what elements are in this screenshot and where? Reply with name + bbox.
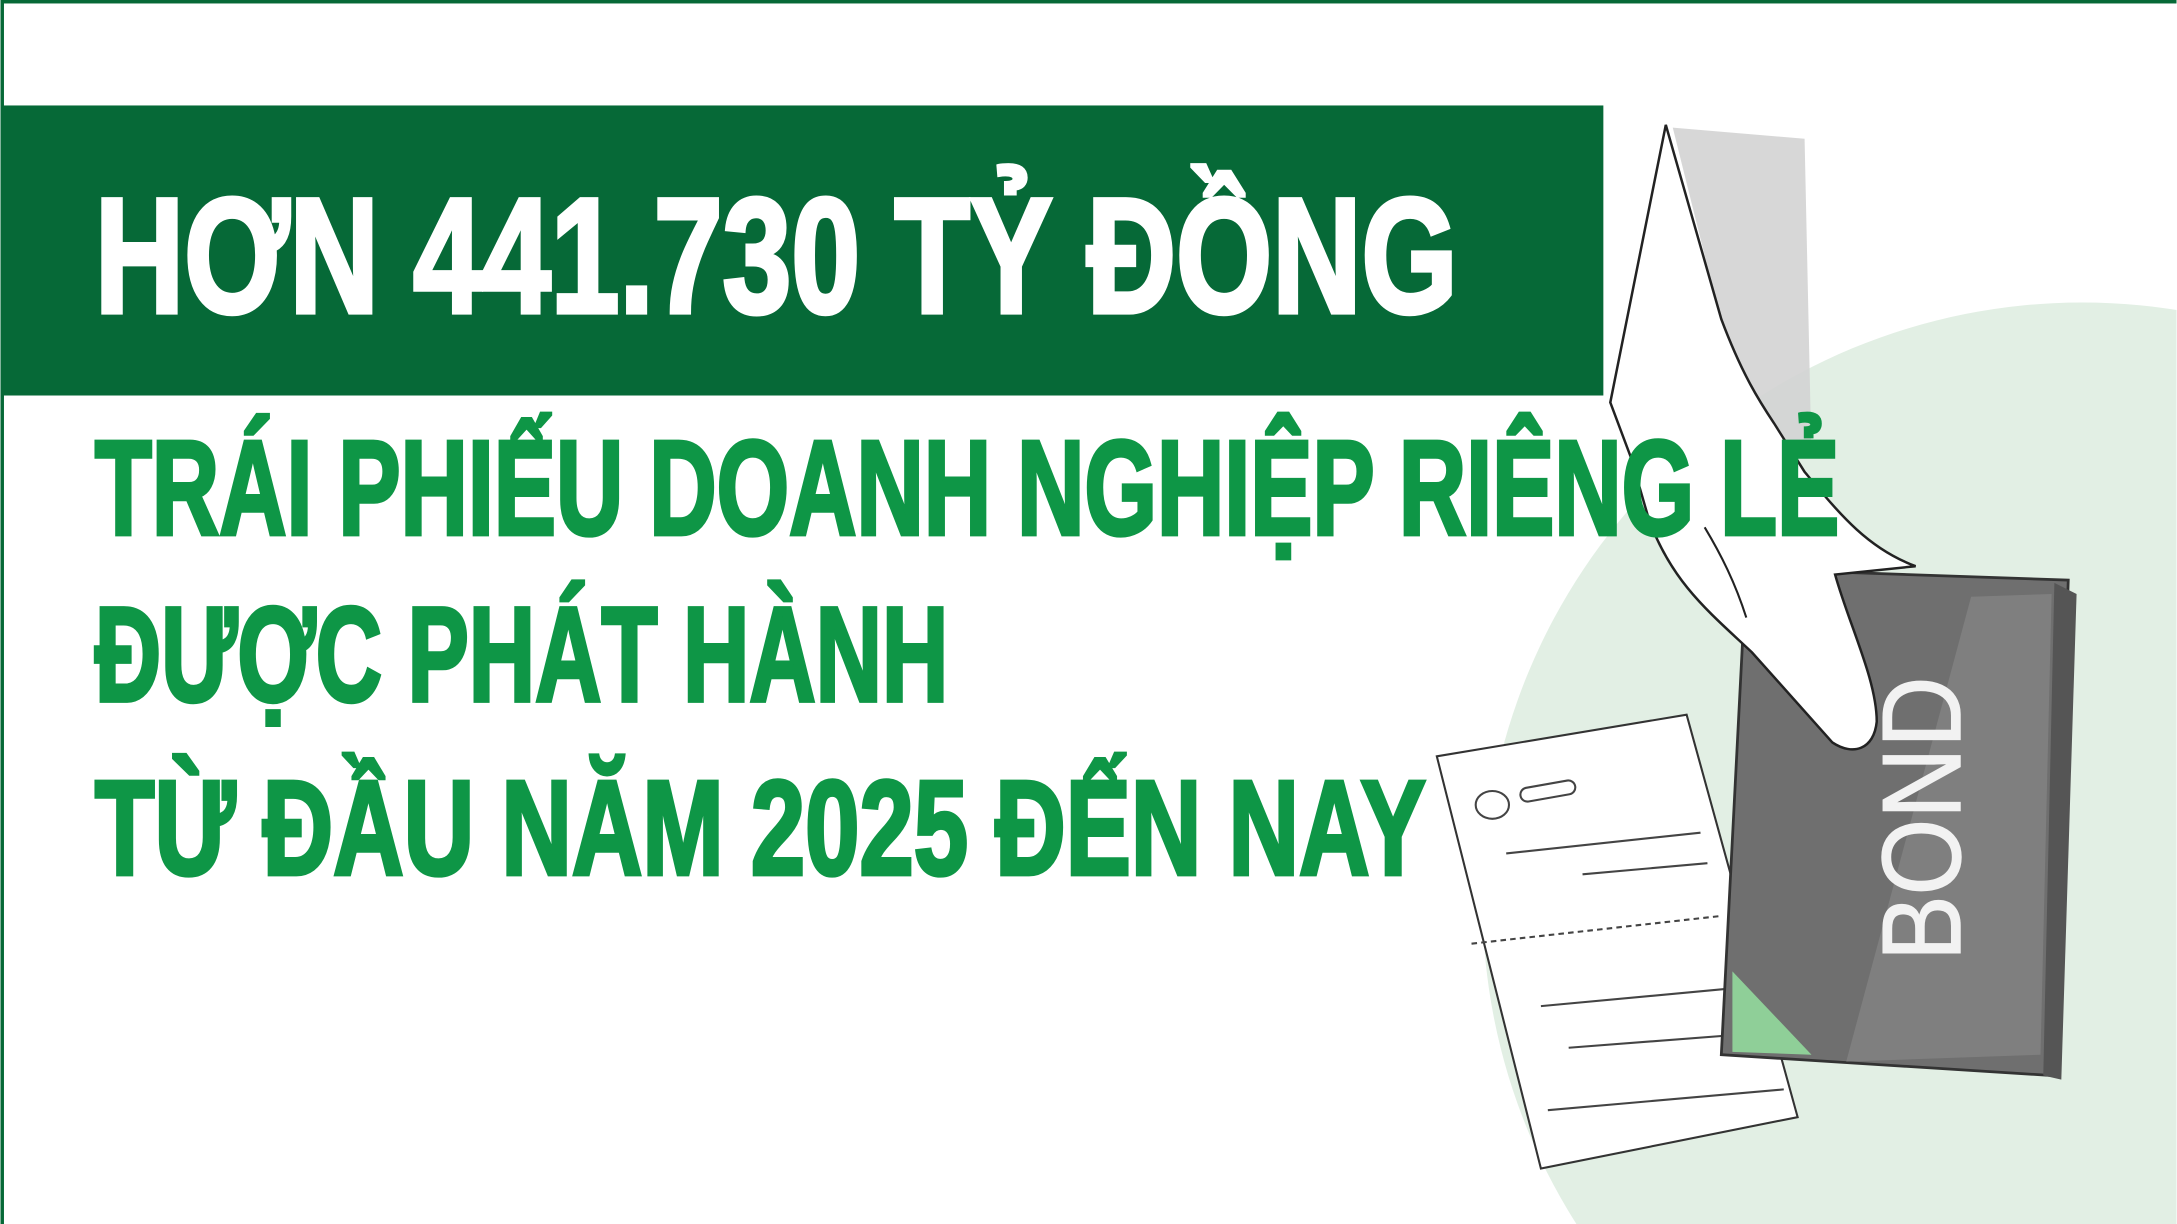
subtitle	[95, 412, 1839, 903]
title banner	[0, 105, 1603, 396]
subtitle: TỪ ĐẦU NĂM 2025 ĐẾN NAY	[95, 752, 1426, 903]
illustration: hand giving bond	[1437, 125, 2077, 1168]
sleeve	[1673, 128, 1812, 458]
subtitle: ĐƯỢC PHÁT HÀNH	[95, 579, 948, 730]
hand	[1610, 125, 1916, 749]
book	[1721, 569, 2077, 1080]
background circle	[1483, 303, 2177, 1224]
BOND label: BOND	[1859, 677, 1984, 961]
green corner	[1732, 971, 1812, 1055]
title text: HƠN 441.730 TỶ ĐỒNG	[95, 164, 1458, 347]
paper	[1437, 715, 1798, 1168]
